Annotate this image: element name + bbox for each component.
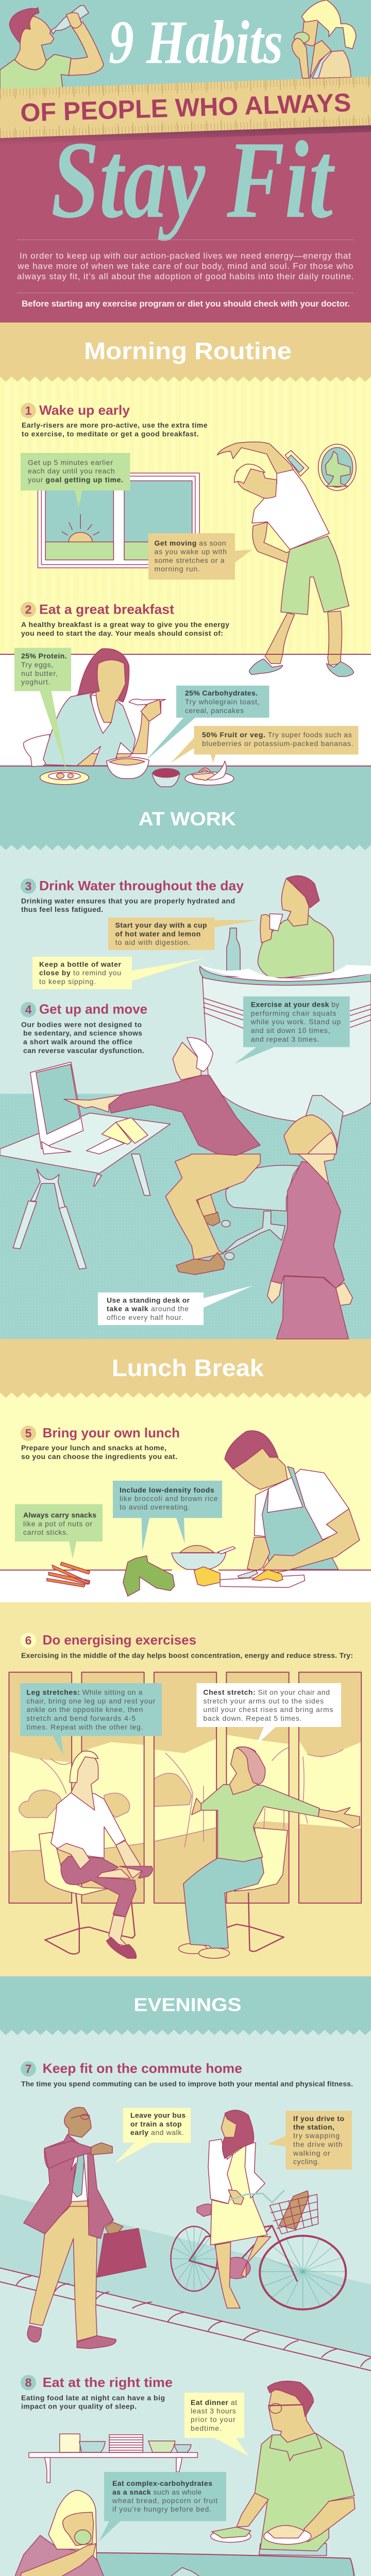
callout: complex carbohydrates: as a snack such as whole [112, 2488, 202, 2496]
callout: complex carbohydrates [99, 2472, 226, 2541]
ribbon shadow [0, 125, 371, 145]
habit 8 heading: 8 [25, 2376, 32, 2389]
illustration: office chair [222, 1095, 343, 1260]
illustration: vegetables on counter [47, 1546, 305, 1596]
habit 4 heading: Get up and move [39, 1002, 147, 1017]
callout: get moving: morning run. [155, 565, 200, 573]
callout: keep a bottle: close by to remind you [39, 969, 121, 977]
habit 5 heading: Bring your own lunch [43, 1425, 180, 1440]
callout: eat dinner [184, 2393, 248, 2456]
illustration: sofa [0, 2553, 371, 2576]
callout: eat dinner: least 3 hours [191, 2407, 236, 2415]
illustration: woman with a cup [227, 876, 333, 978]
divider line [0, 654, 371, 766]
habit 5 text: so you can choose the ingredients you eat. [21, 1452, 177, 1461]
section heading: lunch break: Lunch Break [112, 1354, 264, 1381]
title: 9 Habits: 9 Habits [109, 8, 283, 76]
callout: keep a bottle: to keep sipping. [39, 977, 96, 986]
illustration: desk with monitor [0, 1062, 171, 1269]
callout: complex carbohydrates: if you’re hungry before bed. [112, 2505, 211, 2513]
callout: drive to station [267, 2111, 352, 2170]
callout: get up earlier [21, 453, 130, 507]
illustration: wall pictures [285, 444, 356, 490]
tape measure ribbon [0, 77, 371, 138]
callout: protein: yoghurt. [21, 678, 50, 686]
habit 8 text: Eating food late at night can have a big [21, 2394, 165, 2402]
illustration: window with sunrise [38, 473, 199, 568]
illustration: woman walking [267, 1115, 352, 1339]
habit 4 text [21, 1021, 144, 1055]
illustration: woman doing leg stretch [39, 1751, 153, 1958]
callout: carbohydrates: Try wholegrain toast, [185, 698, 260, 706]
callout: fruit or veg: 50% Fruit or veg. Try super foods such as [202, 731, 352, 739]
callout: protein: nut butter, [21, 669, 58, 677]
habit 3 heading: Drink Water throughout the day [39, 878, 244, 893]
habit 7 text: The time you spend commuting can be used to improve both your mental and physical fitness. [21, 2080, 353, 2088]
intro text [17, 240, 354, 293]
callout: leg stretches: times. Repeat with the other leg. [26, 1723, 143, 1731]
callout: low-density foods: Include low-density foods [120, 1486, 214, 1494]
habit 1 heading: 1 [25, 404, 32, 417]
callout: hot water and lemon: Start your day with a cup [115, 921, 207, 929]
illustration: woman with bicycle [171, 2110, 346, 2309]
habit 3 text: Drinking water ensures that you are properly hydrated and [21, 897, 235, 905]
callout: carry snacks: carrot sticks. [23, 1528, 69, 1536]
illustration: man stretching [217, 442, 353, 676]
habit 6 text: Exercising in the middle of the day helps boost concentration, energy and reduce stress. Try: [21, 1651, 353, 1659]
callout: standing desk: Use a standing desk or [107, 1296, 190, 1304]
callout: low-density foods: like broccoli and brown rice [120, 1495, 218, 1503]
callout: get moving [148, 533, 252, 580]
habit 3 text: thus feel less fatigued. [21, 905, 103, 913]
callout: drive to station: the station, [293, 2123, 334, 2131]
illustration: man with briefcase [24, 2107, 146, 2349]
callout: exercise at desk: while you work. Stand up [250, 1018, 341, 1026]
callout: exercise at desk: and repeat 3 times. [251, 1035, 319, 1043]
callout: carry snacks: like a pot of nuts or [23, 1520, 92, 1528]
doctor warning: Before starting any exercise program or diet you should check with your doctor. [22, 299, 350, 309]
habit 2 heading: Eat a great breakfast [39, 602, 174, 617]
callout: drive to station: the drive with [293, 2140, 342, 2148]
habit 1 text: Early-risers are more pro-active, use the extra time [22, 421, 208, 429]
callout: carry snacks [15, 1504, 103, 1559]
habit 5 heading: 5 [25, 1427, 32, 1440]
intro text: always stay fit, it’s all about the adoption of good habits into their daily routine. [17, 272, 354, 281]
callout: exercise at desk: Exercise at your desk by [251, 1001, 339, 1009]
callout: leg stretches [20, 1683, 162, 1755]
callout: carbohydrates: 25% Carbohydrates. [185, 689, 258, 697]
callout: low-density foods: to avoid overeating. [120, 1503, 190, 1511]
callout: fruit or veg: blueberries or potassium-packed bananas. [202, 739, 353, 748]
callout: get up earlier: each day until you reach [28, 467, 115, 475]
callout: standing desk: take a walk around the [107, 1304, 189, 1313]
callout: exercise at desk: performing chair squats [251, 1009, 336, 1017]
callout: standing desk [98, 1285, 252, 1325]
habit 3 text [21, 897, 235, 913]
habit 4 text: be sedentary, and science shows [23, 1029, 142, 1037]
habit 8 heading: Eat at the right time [43, 2375, 173, 2390]
illustration: woman eating breakfast [24, 649, 165, 767]
habit 8 text [21, 2394, 165, 2411]
callout: leave your bus: Leave your bus [130, 2111, 185, 2120]
callout: drive to station: walking or [293, 2149, 330, 2157]
heading: of people who always: OF PEOPLE WHO ALWAYS [20, 88, 351, 127]
illustration: five windows with trees [0, 1672, 371, 1904]
habit 4 text: Our bodies were not designed to [21, 1021, 142, 1029]
callout: eat dinner: bedtime. [191, 2424, 222, 2432]
habit 6 heading: 6 [25, 1634, 31, 1647]
illustration: road and curb [0, 2194, 371, 2370]
habit 8 text: impact on your quality of sleep. [21, 2402, 137, 2411]
callout: leg stretches: Leg stretches: While sitting on a [26, 1688, 143, 1697]
callout: protein: Try eggs, [21, 660, 53, 669]
illustration: woman eating an apple [292, 0, 356, 78]
callout: get moving: some stretches or a [155, 556, 225, 565]
callout: carry snacks: Always carry snacks [23, 1511, 96, 1519]
callout: chest stretch: Chest stretch: Sit on your chair and [203, 1688, 330, 1697]
habit 4 heading: 4 [25, 1003, 32, 1016]
callout: leave your bus [115, 2108, 191, 2163]
habit 2 text: A healthy breakfast is a great way to give you the energy [21, 620, 229, 629]
callout: carbohydrates: cereal, pancakes [185, 706, 244, 715]
illustration: shelf with dishes [29, 2434, 197, 2483]
habit 4 text: a short walk around the office [23, 1038, 132, 1046]
habit 1 text [22, 421, 208, 438]
intro text: In order to keep up with our action-packed lives we need energy—energy that [20, 251, 351, 261]
callout: leg stretches: stretch and bend forwards 4-5 [26, 1714, 136, 1722]
callout: hot water and lemon: of hot water and lemon [115, 929, 200, 938]
illustration: man drinking from a bottle [0, 6, 104, 90]
callout: eat dinner: Eat dinner at [191, 2398, 237, 2406]
callout: get up earlier: Get up 5 minutes earlier [28, 459, 113, 467]
callout: carbohydrates [145, 686, 269, 761]
illustration: reception desk [200, 966, 371, 1122]
illustration: man chopping vegetables [0, 1431, 371, 1575]
habit 6 heading: Do energising exercises [43, 1632, 196, 1648]
callout: keep a bottle [32, 957, 204, 989]
callout: low-density foods [113, 1481, 222, 1551]
callout: chest stretch [197, 1683, 341, 1744]
callout: leave your bus: early and walk. [130, 2128, 184, 2137]
callout: leave your bus: or train a stop [130, 2120, 182, 2128]
illustration: white countertop [200, 965, 371, 980]
callout: chest stretch: stretch your arms out to the sides [203, 1697, 324, 1705]
habit 1 heading: Wake up early [39, 402, 130, 418]
callout: drive to station: If you drive to [293, 2114, 344, 2123]
callout: complex carbohydrates: wheat bread, popcorn or fruit [112, 2497, 217, 2505]
habit 2 text: you need to start the day. Your meals should consist of: [21, 629, 223, 637]
callout: protein: 25% Protein. [21, 652, 67, 660]
callout: chest stretch: back down. Repeat 5 times. [203, 1714, 301, 1722]
callout: fruit or veg [171, 726, 359, 763]
callout: get up earlier: your goal getting up time. [28, 476, 123, 484]
intro text: we have more of when we take care of our body, mind and soul. For those who [17, 261, 353, 271]
illustration: woman on sofa with cat [15, 2490, 371, 2576]
callout: keep a bottle: Keep a bottle of water [39, 960, 122, 968]
habit 5 text [21, 1444, 177, 1461]
illustration: man standing at desk [64, 1038, 260, 1275]
callout: exercise at desk: and sit down 10 times, [251, 1026, 330, 1035]
callout: drive to station: cycling. [293, 2158, 319, 2166]
section heading: morning routine: Morning Routine [84, 337, 292, 364]
callout: drive to station: try swapping [293, 2131, 340, 2140]
habit 2 text [21, 620, 229, 637]
habit 5 text: Prepare your lunch and snacks at home, [21, 1444, 166, 1452]
illustration: breakfast food [40, 757, 234, 787]
section heading: at work: AT WORK [139, 808, 236, 829]
callout: get moving: as you wake up with [155, 548, 227, 556]
callout: eat dinner: prior to your [191, 2415, 235, 2424]
callout: complex carbohydrates: Eat complex-carbohydrates [112, 2479, 212, 2487]
habit 7 heading: Keep fit on the commute home [43, 2061, 242, 2076]
section heading: evenings: EVENINGS [134, 1994, 241, 2015]
habit 2 heading: 2 [25, 603, 31, 616]
habit 1 text: to exercise, to meditate or get a good breakfast. [22, 430, 199, 438]
callout: exercise at desk [234, 996, 350, 1063]
habit 4 text: can reverse vascular dysfunction. [23, 1046, 144, 1055]
callout: leg stretches: ankle on the opposite knee, then [26, 1705, 143, 1714]
illustration: woman doing chest stretch [179, 1747, 360, 1958]
callout: get moving: Get moving as soon [155, 539, 226, 547]
habit 3 heading: 3 [25, 879, 31, 893]
illustration: man holding plates [211, 2381, 355, 2555]
callout: protein [14, 648, 71, 772]
habit 7 heading: 7 [25, 2062, 31, 2076]
callout: hot water and lemon: to aid with digestion. [115, 938, 190, 946]
callout: leg stretches: chair, bring one leg up and rest your [26, 1697, 156, 1705]
callout: hot water and lemon [108, 918, 258, 950]
callout: standing desk: office every half hour. [107, 1313, 183, 1321]
callout: chest stretch: until your chest rises and bring arms [203, 1705, 333, 1714]
